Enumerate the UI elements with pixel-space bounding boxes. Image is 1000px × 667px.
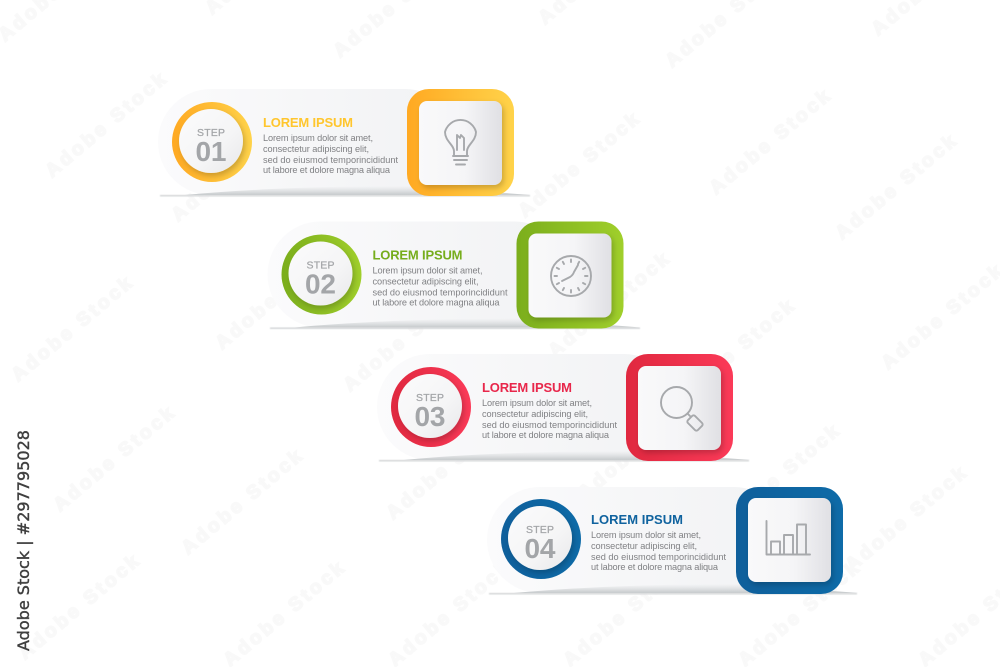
text block xyxy=(372,248,508,308)
text block: Lorem ipsum dolor sit amet, xyxy=(372,266,482,276)
text block: consectetur adipiscing elit, xyxy=(482,409,588,419)
text block: sed do eiusmod temporincididunt xyxy=(482,420,617,430)
watermark pattern: Adobe Stock xyxy=(383,411,511,524)
step badge xyxy=(282,234,362,314)
watermark pattern: Adobe Stock xyxy=(178,446,306,559)
step badge: STEP xyxy=(197,127,225,139)
step badge xyxy=(172,102,252,182)
step badge xyxy=(391,367,471,447)
watermark pattern: Adobe Stock xyxy=(42,69,170,182)
text block xyxy=(263,115,398,175)
step badge: STEP xyxy=(306,260,334,272)
floor shadow xyxy=(270,318,640,329)
watermark pattern: Adobe Stock xyxy=(575,391,703,504)
text block: LOREM IPSUM xyxy=(263,115,353,130)
panel: step 01 xyxy=(158,89,530,196)
watermark pattern: Adobe Stock xyxy=(15,551,143,664)
step badge: 04 xyxy=(524,533,556,564)
step badge: 01 xyxy=(196,136,226,167)
text block: sed do eiusmod temporincididunt xyxy=(372,288,508,298)
watermark pattern: Adobe Stock xyxy=(50,403,178,516)
text block: ut labore et dolore magna aliqua xyxy=(482,430,610,440)
text block: LOREM IPSUM xyxy=(482,380,572,395)
step badge: 02 xyxy=(305,268,336,300)
step badge: STEP xyxy=(416,392,444,404)
text block: ut labore et dolore magna aliqua xyxy=(591,562,719,572)
text block xyxy=(482,380,617,440)
icon tile: light bulb xyxy=(407,89,514,196)
icon tile: magnifying glass xyxy=(626,354,733,461)
card background xyxy=(268,222,568,328)
watermark pattern: Adobe Stock xyxy=(706,86,834,199)
watermark pattern: Adobe Stock xyxy=(340,283,468,396)
floor shadow xyxy=(489,584,858,594)
watermark pattern: Adobe Stock xyxy=(832,131,960,244)
step badge xyxy=(501,499,581,579)
text block: sed do eiusmod temporincididunt xyxy=(263,155,398,165)
card background xyxy=(487,487,787,593)
panel: step 02 xyxy=(268,222,640,329)
watermark pattern: Adobe Stock xyxy=(8,273,136,386)
floor shadow xyxy=(379,451,750,461)
panel: step 04 xyxy=(487,487,858,594)
card background xyxy=(377,354,677,460)
text block: sed do eiusmod temporincididunt xyxy=(591,552,726,562)
watermark pattern: Adobe Stock xyxy=(212,241,340,354)
watermark pattern: Adobe Stock xyxy=(168,113,296,226)
text block: consectetur adipiscing elit, xyxy=(372,276,478,286)
text block: ut labore et dolore magna aliqua xyxy=(263,165,391,175)
step badge: STEP xyxy=(526,524,554,536)
panel: step 03 xyxy=(377,354,750,461)
card background xyxy=(158,89,458,195)
watermark pattern: Adobe Stock xyxy=(545,249,673,362)
text block: consectetur adipiscing elit, xyxy=(591,541,697,551)
text block: ut labore et dolore magna aliqua xyxy=(372,298,500,308)
credit: stock id: Adobe Stock | #297795028 xyxy=(14,430,33,651)
text block: LOREM IPSUM xyxy=(591,512,683,527)
text block xyxy=(591,512,726,572)
watermark pattern: Adobe Stock xyxy=(515,109,643,222)
text block: Lorem ipsum dolor sit amet, xyxy=(482,398,592,408)
icon tile: bar chart xyxy=(736,487,843,594)
text block: Lorem ipsum dolor sit amet, xyxy=(263,133,373,143)
watermark pattern: Adobe Stock xyxy=(670,296,798,409)
watermark pattern: Adobe Stock xyxy=(842,463,970,576)
text block: LOREM IPSUM xyxy=(372,248,462,262)
text block: Lorem ipsum dolor sit amet, xyxy=(591,530,701,540)
floor shadow xyxy=(160,186,530,196)
text block: consectetur adipiscing elit, xyxy=(263,144,369,154)
watermark pattern: Adobe Stock xyxy=(715,421,843,534)
icon tile: clock xyxy=(516,222,624,328)
step badge: 03 xyxy=(414,401,446,432)
